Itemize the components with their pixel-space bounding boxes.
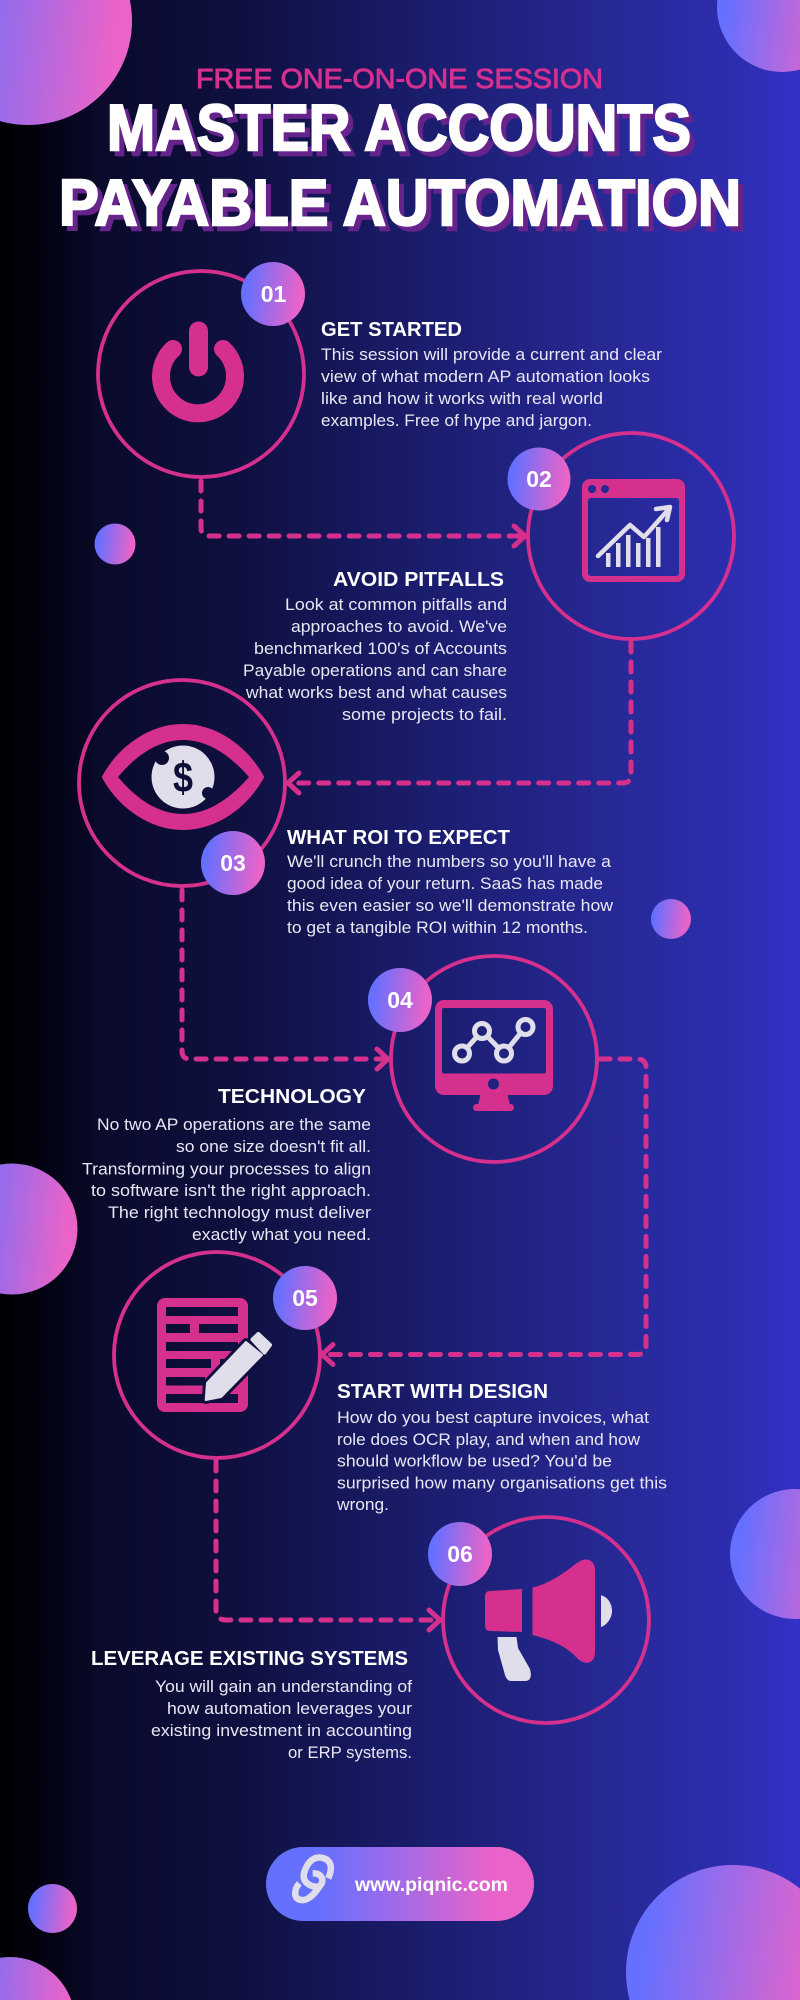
step 3 body text: this even easier so we'll demonstrate how (287, 897, 613, 915)
step 3 ring (79, 680, 285, 886)
step 4: technology (82, 956, 597, 1244)
icon: monitor with line chart (435, 1000, 553, 1111)
step 5: start with design (114, 1252, 667, 1514)
icon: chain link (295, 1858, 331, 1900)
step 5 body text (336, 1409, 667, 1514)
step 2 heading: AVOID PITFALLS (333, 569, 504, 591)
step 3: what ROI to expect (79, 680, 613, 937)
step 5 heading: START WITH DESIGN (337, 1381, 548, 1403)
icon: megaphone (485, 1559, 612, 1681)
badge 06: 06 (447, 1541, 473, 1567)
step 2 body text: Look at common pitfalls and (285, 596, 507, 614)
step 6 body text: You will gain an understanding of (155, 1678, 412, 1696)
step 2: avoid pitfalls (243, 433, 734, 724)
step 4 body text: exactly what you need. (192, 1226, 371, 1244)
step 2 body text: Payable operations and can share (243, 662, 507, 680)
step 2 body text: what works best and what causes (245, 684, 507, 702)
step 3 body text: good idea of your return. SaaS has made (287, 875, 603, 893)
step 6 body text: how automation leverages your (167, 1700, 413, 1718)
badge 02: 02 (526, 466, 552, 492)
step 6 body text: existing investment in accounting (151, 1722, 412, 1740)
connector: step 1 to step 2 (201, 481, 525, 546)
icon: power button (161, 331, 235, 413)
main title: PAYABLE AUTOMATION (59, 166, 741, 239)
step 2 body text: approaches to avoid. We've (291, 618, 507, 636)
step 4 body text: to software isn't the right approach. (91, 1182, 371, 1200)
icon: eye with dollar coin: $ (173, 754, 193, 802)
step 2 body text (243, 596, 507, 724)
step 1 heading: GET STARTED (321, 319, 462, 341)
main title (59, 91, 741, 239)
step 5 body text: wrong. (336, 1496, 389, 1514)
step 3 body text: We'll crunch the numbers so you'll have a (287, 853, 612, 871)
step 1 body text (321, 346, 663, 430)
website url: www.piqnic.com (354, 1875, 508, 1896)
step 2 body text: benchmarked 100's of Accounts (254, 640, 507, 658)
step 3 body text (287, 853, 613, 937)
icon: eye with dollar coin (104, 726, 262, 828)
step 1: get started (98, 262, 663, 477)
step 1 body text: like and how it works with real world (321, 390, 603, 408)
step 2 body text: some projects to fail. (342, 706, 507, 724)
step 5 body text: surprised how many organisations get this (337, 1474, 667, 1492)
connector: step 5 to step 6 (216, 1461, 440, 1630)
step 4 body text: so one size doesn't fit all. (176, 1138, 371, 1156)
badge 01: 01 (261, 281, 286, 307)
step 6 heading: LEVERAGE EXISTING SYSTEMS (91, 1648, 408, 1670)
badge 04: 04 (387, 987, 413, 1013)
step 5 body text: should workflow be used? You'd be (337, 1452, 612, 1470)
badge 04 (368, 968, 432, 1032)
step 4 body text: No two AP operations are the same (97, 1116, 371, 1134)
step 6 body text: or ERP systems. (288, 1744, 412, 1762)
badge 03: 03 (220, 850, 246, 876)
step 1 ring (98, 271, 304, 477)
badge 03 (201, 831, 265, 895)
icon: document with pencil (157, 1298, 270, 1412)
step 2 ring (528, 433, 734, 639)
badge 02 (508, 448, 570, 510)
step 4 body text: The right technology must deliver (108, 1204, 372, 1222)
badge 01 (241, 262, 305, 326)
step 4 ring (391, 956, 597, 1162)
icon: browser window with growth chart (582, 479, 685, 582)
badge 05 (273, 1266, 337, 1330)
step 6 body text (151, 1678, 413, 1762)
badge 05: 05 (292, 1285, 318, 1311)
step 1 body text: view of what modern AP automation looks (321, 368, 650, 386)
eyebrow heading: FREE ONE-ON-ONE SESSION (196, 63, 603, 94)
badge 06 (428, 1522, 492, 1586)
step 5 body text: How do you best capture invoices, what (337, 1409, 649, 1427)
step 3 body text: to get a tangible ROI within 12 months. (287, 919, 588, 937)
step 5 ring (114, 1252, 320, 1458)
connector: step 3 to step 4 (182, 890, 388, 1069)
step 1 body text: This session will provide a current and clear (321, 346, 663, 364)
step 6 ring (443, 1517, 649, 1723)
step 1 body text: examples. Free of hype and jargon. (321, 412, 592, 430)
step 4 body text: Transforming your processes to align (82, 1160, 371, 1178)
connector: step 2 to step 3 (288, 642, 631, 793)
step 4 body text (82, 1116, 372, 1244)
step 3 heading: WHAT ROI TO EXPECT (287, 827, 510, 849)
website link pill (266, 1847, 534, 1921)
step 5 body text: role does OCR play, and when and how (337, 1431, 640, 1449)
connector: step 4 to step 5 (322, 1059, 646, 1364)
step 6: leverage existing systems (91, 1517, 649, 1762)
main title: MASTER ACCOUNTS (107, 91, 691, 164)
step 4 heading: TECHNOLOGY (218, 1086, 367, 1108)
